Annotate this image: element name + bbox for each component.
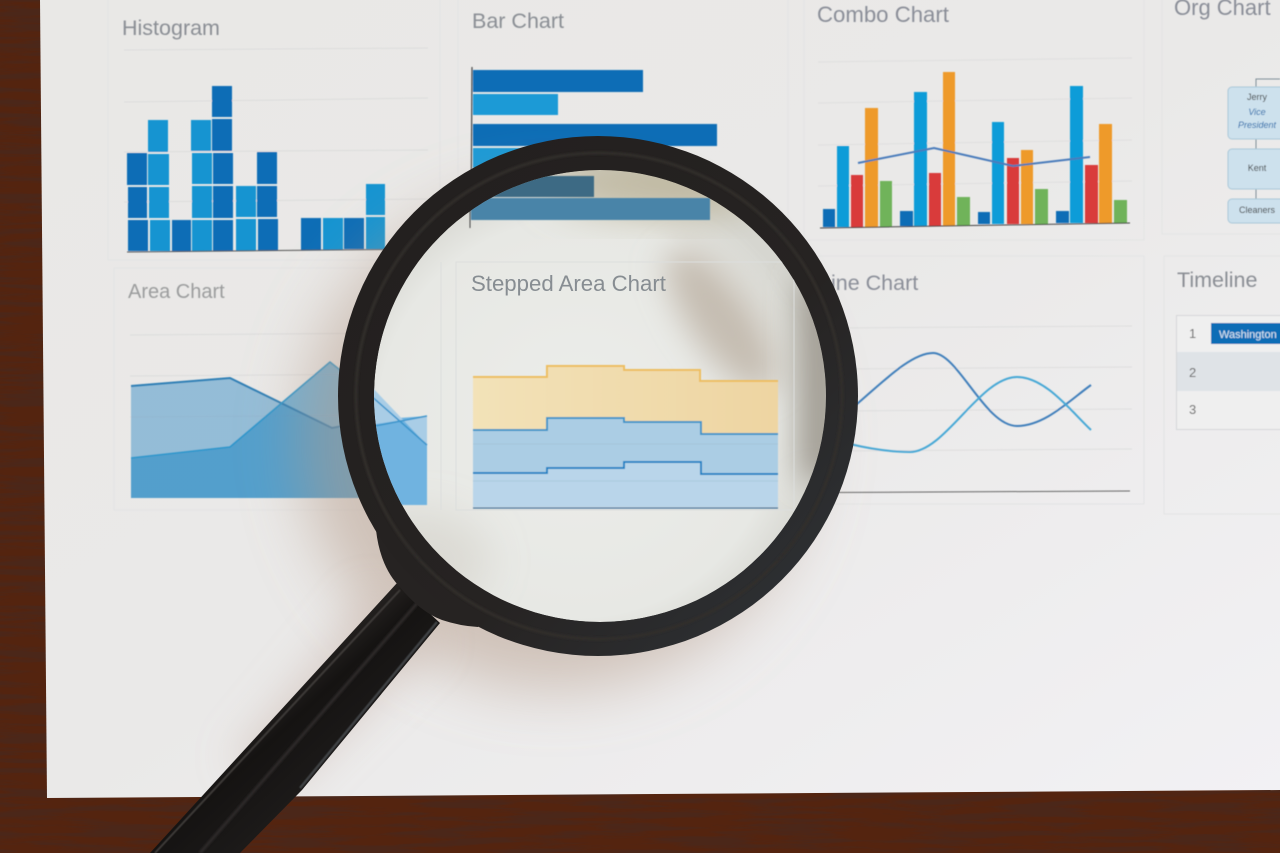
- org node: Cleaners: Cleaners: [1239, 205, 1276, 215]
- lens view: [350, 155, 840, 622]
- magnifying glass: [150, 136, 858, 853]
- lens background: [374, 170, 826, 622]
- bar chart axis: [471, 67, 472, 228]
- panel: area chart: [128, 282, 359, 499]
- heading: Combo Chart: Combo Chart: [817, 2, 949, 27]
- combo chart bars: [823, 72, 1127, 227]
- line chart axis: [830, 491, 1130, 492]
- bar chart bars: [473, 70, 717, 168]
- timeline row numbers: 2: [1189, 365, 1196, 380]
- line chart series: [850, 353, 1091, 452]
- org node: Jerry: Jerry: [1247, 92, 1267, 102]
- stepped axis: [473, 507, 778, 509]
- panel: combo chart: [817, 2, 1132, 228]
- stepped area chart: [473, 366, 778, 508]
- heading: Area Chart: Area Chart: [128, 281, 225, 303]
- combo chart trend line: [858, 148, 1090, 166]
- stepped series: mid blue: [473, 418, 778, 474]
- ring: [338, 136, 858, 656]
- heading: Timeline: Timeline: [1177, 268, 1257, 292]
- combo chart grid: [836, 97, 1112, 188]
- timeline table: [1176, 316, 1280, 430]
- heading: Histogram: Histogram: [122, 16, 220, 40]
- heading: Bar Chart: Bar Chart: [472, 9, 564, 33]
- area chart grid: [131, 334, 314, 377]
- area chart series: [130, 360, 359, 499]
- org node: Kent: [1228, 149, 1280, 189]
- heading: Line Chart: Line Chart: [819, 271, 918, 295]
- combo chart axis: [820, 223, 1130, 228]
- stepped series: amber: [473, 366, 778, 434]
- org node: Jerry: Vice: [1248, 107, 1266, 117]
- panel: bar chart: [470, 12, 718, 170]
- stepped series: low blue: [473, 462, 778, 507]
- collar: [376, 500, 520, 627]
- org node: Kent: Kent: [1248, 163, 1267, 173]
- timeline row numbers: 3: [1189, 402, 1196, 417]
- org chart connectors: [1256, 79, 1280, 199]
- stepped outlines: [473, 366, 778, 474]
- panel: org chart: [1174, 0, 1280, 223]
- line chart grid: [838, 326, 1132, 451]
- printed charts: [108, 0, 1280, 514]
- timeline row numbers: [1189, 326, 1196, 417]
- magnified heading: Stepped Area Chart: Stepped Area Chart: [471, 271, 666, 296]
- magnified panel outline: [441, 262, 794, 510]
- histogram axis: [127, 250, 386, 252]
- handle: [150, 583, 440, 853]
- org node: Cleaners: [1228, 199, 1280, 223]
- panel outlines: [108, 0, 1280, 514]
- panel: histogram: [122, 16, 428, 252]
- org node: Jerry: [1228, 87, 1280, 139]
- panel: timeline: [1176, 268, 1280, 430]
- org node: Jerry: President: [1238, 120, 1277, 130]
- magnified area chart fragment: [370, 385, 427, 505]
- histogram bars: [127, 86, 385, 251]
- timeline row numbers: 1: [1189, 326, 1196, 341]
- magnified bar chart bars: [470, 170, 710, 228]
- histogram grid: [124, 48, 428, 202]
- stepped grid: [473, 444, 778, 481]
- shadow of the magnifier on paper: [230, 190, 810, 790]
- lens shadows: [350, 155, 840, 610]
- timeline bar: Washington: Washington: [1219, 329, 1277, 341]
- panel: line chart: [819, 271, 1132, 492]
